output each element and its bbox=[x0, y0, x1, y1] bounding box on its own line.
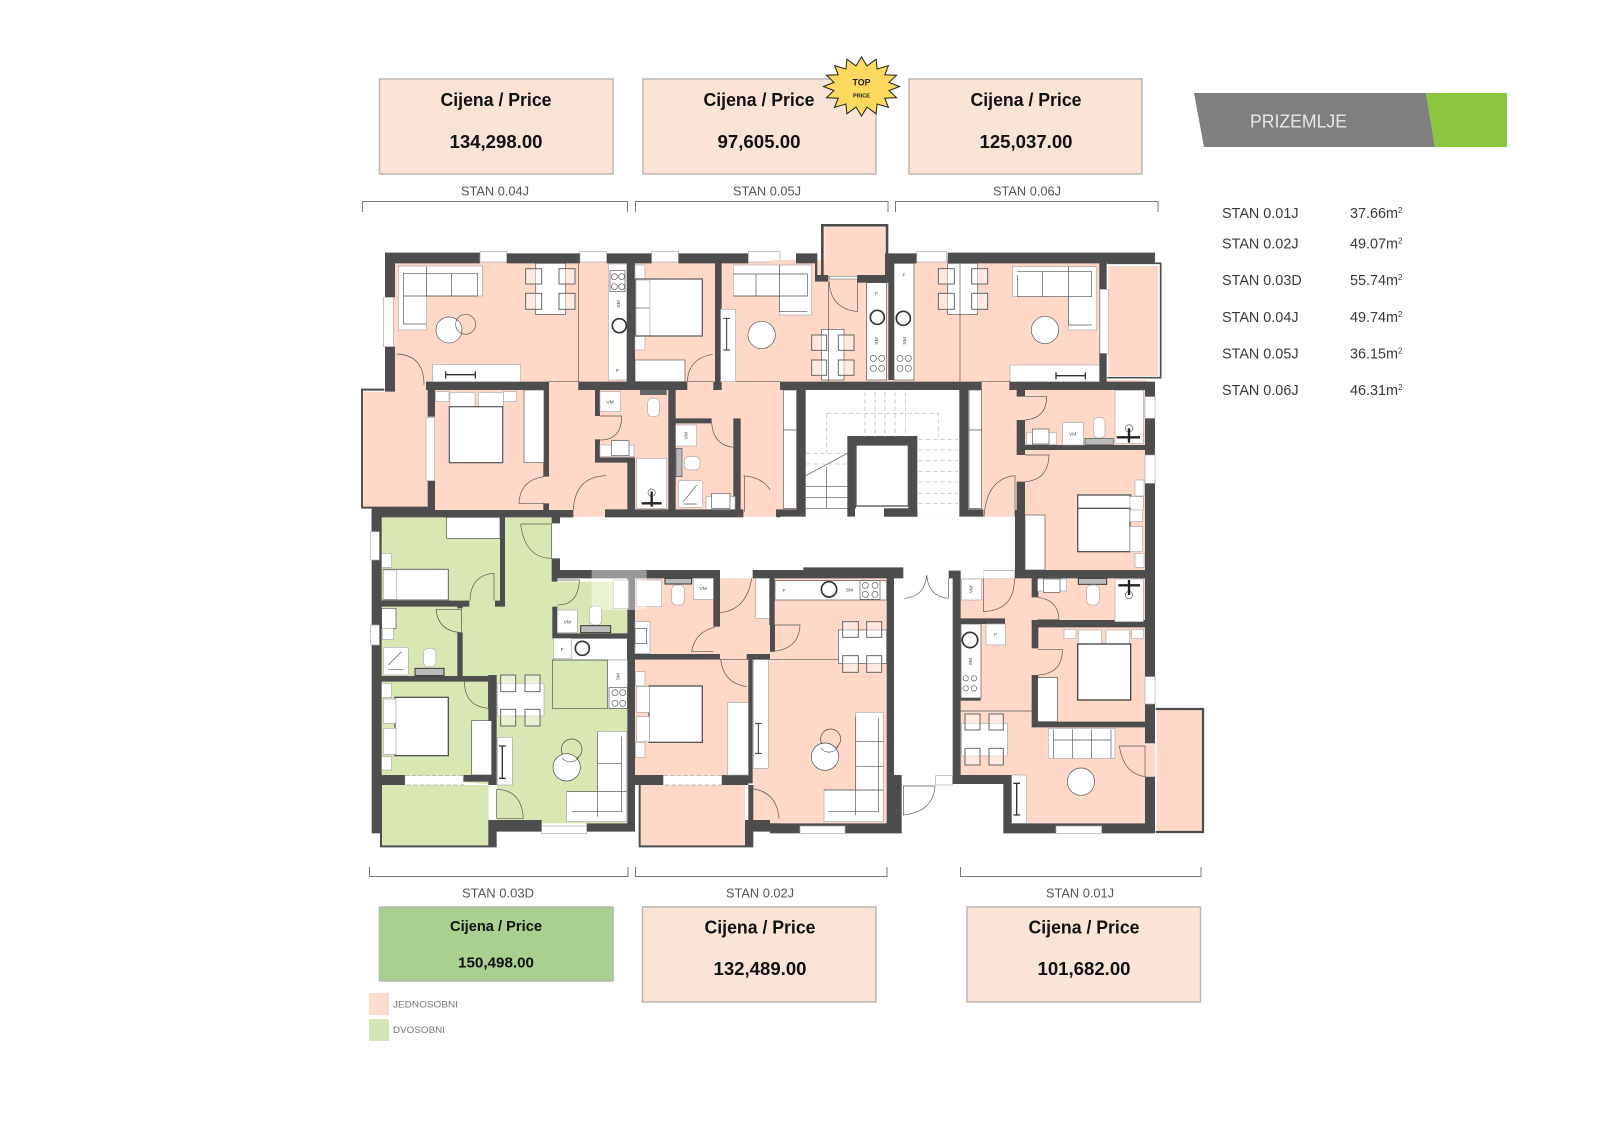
area table: 2 bbox=[1398, 383, 1403, 392]
price card: STAN 0.03D bbox=[380, 907, 613, 981]
bathrooms 0.04J and 0.05J: VM bbox=[683, 432, 689, 439]
unit bracket: STAN 0.05J: STAN 0.05J bbox=[733, 184, 801, 198]
bathroom 0.03D bbox=[382, 606, 611, 676]
floor plan bbox=[362, 225, 1203, 847]
price card: STAN 0.01J: Cijena / Price bbox=[1028, 918, 1140, 938]
furniture 0.06J: SM bbox=[902, 337, 908, 345]
bathroom 0.06J bbox=[1027, 390, 1143, 445]
area table: 55.74m bbox=[1350, 273, 1398, 289]
plan: lower left (STAN 0.03D green and STAN 0.02J) bbox=[371, 510, 780, 847]
watermark patch bbox=[592, 568, 647, 610]
unit bracket: STAN 0.03D bbox=[370, 867, 628, 900]
dining and living 0.02J bbox=[770, 622, 887, 822]
kitchen 0.02J bbox=[775, 581, 887, 600]
area table: 49.74m bbox=[1350, 310, 1398, 326]
plan: upper left (STAN 0.04J and 0.05J) bbox=[362, 251, 781, 540]
unit bracket: STAN 0.03D: STAN 0.03D bbox=[462, 886, 534, 900]
furniture 0.05J bbox=[733, 265, 887, 382]
plan: upper right (stairwell, STAN 0.05J and 0.06J) bbox=[733, 225, 1161, 543]
price card: STAN 0.02J: 132,489.00 bbox=[714, 959, 806, 979]
bathroom 0.06J: VM bbox=[1069, 432, 1076, 438]
floor banner: PRIZEMLJE bbox=[1194, 93, 1507, 147]
area table: STAN 0.06J bbox=[1222, 383, 1299, 399]
furniture 0.06J bbox=[894, 263, 1099, 382]
price card: STAN 0.01J: 101,682.00 bbox=[1038, 959, 1130, 979]
price card: STAN 0.05J: 97,605.00 bbox=[718, 132, 800, 152]
kitchen 0.03D: SM bbox=[615, 673, 621, 680]
area table: STAN 0.02J bbox=[1222, 236, 1299, 252]
price card: STAN 0.05J: Cijena / Price bbox=[704, 90, 814, 110]
kitchen, bath and entry 0.01J bbox=[961, 578, 1143, 698]
badge: top price starburst: TOP bbox=[852, 78, 871, 88]
kitchen and living furniture 0.04J bbox=[398, 263, 627, 382]
kitchen 0.02J: F bbox=[782, 588, 786, 594]
area table bbox=[1222, 206, 1403, 399]
price card: STAN 0.04J bbox=[380, 79, 613, 174]
kitchen 0.02J: SM bbox=[846, 588, 853, 594]
area table: 2 bbox=[1398, 346, 1403, 356]
kitchen 0.03D: F bbox=[561, 647, 564, 653]
unit bracket: STAN 0.04J bbox=[362, 184, 628, 212]
furniture 0.05J: F bbox=[875, 291, 878, 297]
windows bbox=[371, 532, 722, 833]
price card: STAN 0.06J bbox=[909, 79, 1142, 174]
furniture 0.06J: F bbox=[902, 273, 906, 279]
dining and living 0.03D bbox=[497, 675, 627, 822]
kitchen and living furniture 0.04J: SM bbox=[616, 300, 622, 308]
bedroom and bath 0.02J: VM bbox=[699, 586, 707, 592]
unit bracket: STAN 0.02J bbox=[636, 867, 887, 900]
doors bbox=[748, 575, 1145, 818]
area table: STAN 0.01J bbox=[1222, 206, 1299, 222]
unit bracket: STAN 0.06J bbox=[896, 184, 1158, 212]
bedroom 1 0.03D bbox=[382, 517, 500, 600]
area table: 46.31m bbox=[1350, 383, 1398, 399]
bedroom 2 0.03D bbox=[382, 683, 492, 775]
price card: STAN 0.05J bbox=[643, 79, 876, 174]
plan: lower right (STAN 0.02J living and STAN 0.01J) bbox=[748, 508, 1203, 833]
furniture 0.05J: SM bbox=[874, 337, 880, 345]
area table: STAN 0.04J bbox=[1222, 310, 1299, 326]
floor banner: PRIZEMLJE: PRIZEMLJE bbox=[1250, 112, 1347, 132]
windows bbox=[917, 251, 1155, 483]
stairs bbox=[806, 392, 958, 508]
bedroom 0.06J lower bbox=[1025, 508, 1144, 570]
unit bracket: STAN 0.06J: STAN 0.06J bbox=[993, 184, 1061, 198]
bathroom 0.03D: VM bbox=[564, 619, 571, 625]
bathrooms 0.04J and 0.05J: VM bbox=[606, 399, 614, 405]
area table: 2 bbox=[1398, 273, 1403, 282]
bathrooms 0.04J and 0.05J bbox=[600, 390, 735, 509]
bedroom furniture 0.05J bbox=[635, 265, 736, 382]
corridor wardrobes bbox=[783, 390, 982, 508]
price card: STAN 0.04J: Cijena / Price bbox=[440, 90, 552, 110]
legend: JEDNOSOBNI bbox=[393, 1000, 458, 1010]
price card: STAN 0.01J bbox=[967, 907, 1200, 1002]
badge: top price starburst bbox=[824, 57, 900, 116]
price card: STAN 0.06J: Cijena / Price bbox=[970, 90, 1082, 110]
windows bbox=[383, 251, 780, 481]
windows and entry bbox=[800, 677, 1155, 833]
unit bracket: STAN 0.02J: STAN 0.02J bbox=[726, 886, 794, 900]
unit bracket: STAN 0.01J bbox=[960, 867, 1201, 900]
bedroom furniture 0.04J bbox=[436, 390, 544, 463]
doors bbox=[436, 524, 779, 818]
price card: STAN 0.03D: 150,498.00 bbox=[458, 954, 534, 972]
badge: top price starburst: PRICE bbox=[853, 94, 871, 100]
kitchen, bath and entry 0.01J: F bbox=[994, 632, 997, 638]
bedroom 0.06J top bbox=[1025, 480, 1144, 543]
area table: 2 bbox=[1398, 310, 1403, 319]
legend: DVOSOBNI bbox=[393, 1025, 445, 1036]
price card: STAN 0.03D: Cijena / Price bbox=[450, 918, 542, 935]
area table: 49.07m bbox=[1350, 236, 1398, 252]
area table: 2 bbox=[1398, 236, 1403, 246]
price card: STAN 0.06J: 125,037.00 bbox=[980, 132, 1072, 152]
kitchen, bath and entry 0.01J: SM bbox=[968, 658, 974, 665]
area table: STAN 0.05J bbox=[1222, 346, 1299, 362]
doors bbox=[397, 354, 776, 512]
area table: 37.66m bbox=[1350, 206, 1398, 222]
unit bracket: STAN 0.05J bbox=[636, 184, 888, 212]
unit bracket: STAN 0.04J: STAN 0.04J bbox=[461, 184, 529, 198]
unit bracket: STAN 0.01J: STAN 0.01J bbox=[1046, 886, 1114, 900]
price card: STAN 0.02J bbox=[642, 907, 876, 1002]
living 0.01J bbox=[961, 711, 1115, 823]
kitchen, bath and entry 0.01J: VM bbox=[969, 586, 975, 593]
bedroom and bath 0.02J bbox=[613, 578, 769, 775]
doors bbox=[829, 279, 1049, 517]
bedroom 0.01J bbox=[1038, 629, 1144, 722]
price card: STAN 0.02J: Cijena / Price bbox=[704, 918, 816, 938]
area table: 36.15m bbox=[1350, 346, 1398, 362]
kitchen and living furniture 0.04J: F bbox=[616, 368, 619, 374]
price card: STAN 0.04J: 134,298.00 bbox=[450, 132, 542, 152]
kitchen 0.03D bbox=[552, 638, 627, 708]
legend bbox=[369, 993, 458, 1041]
area table: STAN 0.03D bbox=[1222, 273, 1302, 289]
area table: 2 bbox=[1398, 206, 1403, 215]
